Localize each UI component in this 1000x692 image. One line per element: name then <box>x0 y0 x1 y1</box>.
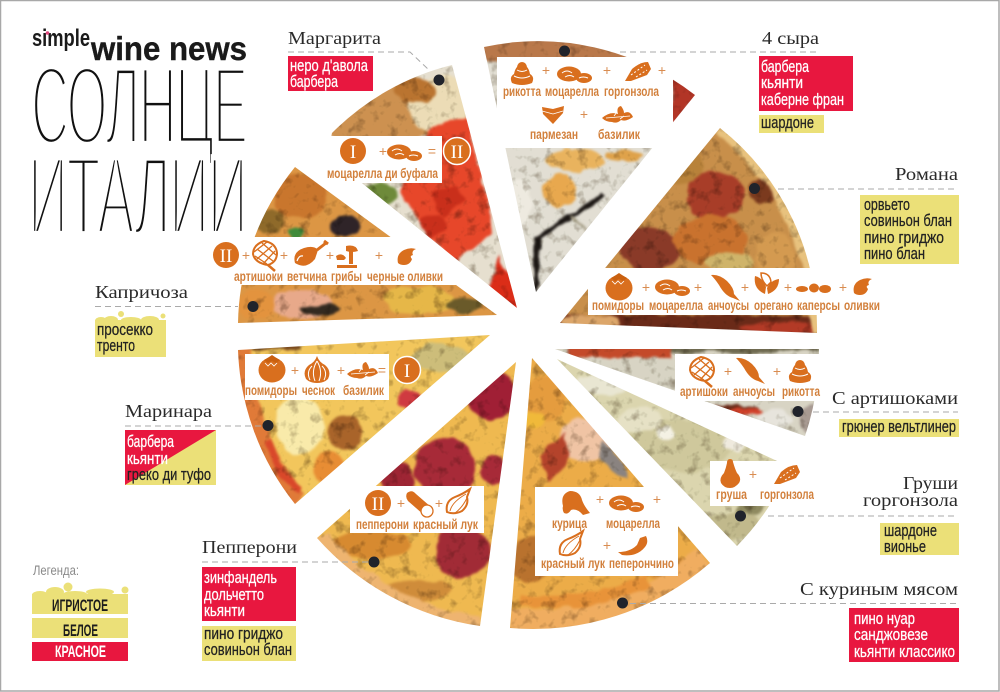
ingredient label: 4 сыра: + <box>603 62 611 78</box>
badge II: II <box>451 142 463 163</box>
badge II <box>444 138 470 164</box>
ingredient label: Маргарита: + <box>379 143 387 159</box>
ingredient label: Капричоза: ветчина <box>287 268 327 284</box>
callout: Романа: орвьето <box>864 195 910 214</box>
ingredient label: С куриным мясом: красный лук <box>541 555 606 571</box>
ingredient label: Капричоза: + <box>326 247 334 263</box>
ingredient label: Пепперони: + <box>435 495 443 511</box>
callout: Пепперони: Пепперони <box>202 537 297 557</box>
callout: Романа <box>749 164 959 264</box>
icon: basil <box>347 362 378 379</box>
callout: С куриным мясом: С куриным мясом <box>800 579 958 599</box>
ingredient label: С куриным мясом: пеперончино <box>609 555 674 571</box>
pizza slice: Пепперони <box>317 362 516 626</box>
icon: artichoke <box>690 357 714 387</box>
ingredient label: Капричоза: + <box>280 247 288 263</box>
legend: white: БЕЛОЕ <box>63 621 98 640</box>
icon: basil <box>602 106 633 123</box>
ingredient label: Пепперони <box>350 486 484 533</box>
callout: Пепперони: совиньон блан <box>204 640 292 659</box>
ingredient label: С куриным мясом <box>535 487 678 576</box>
icon: ricotta <box>511 62 533 85</box>
ingredient label: С артишоками: анчоусы <box>733 383 775 399</box>
callout: Маринара <box>125 401 274 485</box>
ingredient label: Романа: орегано <box>754 297 793 313</box>
callout: 4 сыра: 4 сыра <box>762 28 819 48</box>
ingredient label: С куриным мясом: + <box>653 491 661 507</box>
callout: С артишоками <box>792 388 959 437</box>
legend: sparkling: ИГРИСТОЕ <box>52 596 108 615</box>
callout: Маринара: барбера <box>127 432 174 451</box>
icon: pear <box>720 459 740 488</box>
icon: tomato <box>258 355 286 382</box>
ingredient label: С артишоками <box>675 354 821 401</box>
callout: Пепперони: дольчетто <box>204 585 264 604</box>
callout: Капричоза: просекко <box>97 320 153 339</box>
ingredient label: Романа: помидоры <box>592 297 644 313</box>
ingredient label: Маринара <box>245 354 420 400</box>
ingredient label: Романа: + <box>642 279 650 295</box>
ingredient label: Романа: + <box>839 279 847 295</box>
callout: Романа: пино гриджо <box>864 228 944 247</box>
ingredient label: Романа: + <box>741 279 749 295</box>
icon: gorgonzola <box>774 465 800 484</box>
badge I <box>340 138 366 164</box>
callout: Маринара: кьянти <box>127 449 168 468</box>
callout: 4 сыра <box>559 28 853 133</box>
ingredient label: Груши горгонзола: груша <box>716 486 747 502</box>
ingredient label: Капричоза: + <box>242 247 250 263</box>
icon: sausage <box>406 491 433 517</box>
ingredient label: Маринара: помидоры <box>245 382 297 398</box>
ingredient label: Романа: моцарелла <box>649 297 703 313</box>
legend <box>32 562 128 661</box>
callout: Маргарита: Маргарита <box>288 28 381 48</box>
ingredient label: Романа: + <box>694 279 702 295</box>
icon: mozzarella <box>557 66 592 83</box>
logo: simple wine news: wine news <box>90 30 247 67</box>
ingredient label: Капричоза: артишоки <box>234 268 283 284</box>
ingredient label: Романа <box>588 268 882 315</box>
ingredient label: С артишоками: рикотта <box>782 383 820 399</box>
pizza slice: Капричоза <box>238 167 497 323</box>
ingredient label: 4 сыра: пармезан <box>530 126 578 142</box>
ingredient label: Капричоза: грибы <box>331 268 362 284</box>
callout: 4 сыра: барбера <box>761 57 809 76</box>
icon: olive <box>854 278 872 295</box>
ingredient label: 4 сыра: рикотта <box>503 83 541 99</box>
ingredient label: С куриным мясом: + <box>596 491 604 507</box>
ingredient label: Романа: + <box>784 279 792 295</box>
ingredient label: Романа: оливки <box>844 297 880 313</box>
callout: Пепперони <box>202 537 380 661</box>
callout: 4 сыра: кьянти <box>761 73 803 92</box>
pizza slice: Романа <box>560 128 818 333</box>
ingredient label: Капричоза <box>213 237 457 285</box>
ingredient label: С артишоками: + <box>724 363 732 379</box>
ingredient label: Пепперони: красный лук <box>413 516 479 532</box>
callout: Маринара: Маринара <box>125 401 212 421</box>
callout: Капричоза <box>95 282 258 357</box>
ingredient label: Маргарита: моцарелла ди буфала <box>327 165 438 181</box>
icon: capers <box>796 284 831 293</box>
icon: oregano <box>755 273 779 294</box>
icon: anchovy <box>711 275 740 301</box>
ingredient label: Груши горгонзола: + <box>749 466 757 482</box>
badge I: I <box>350 142 356 163</box>
icon: ricotta <box>789 360 811 383</box>
icon: garlic <box>305 356 329 383</box>
ingredient label: С артишоками: артишоки <box>680 383 728 399</box>
icon: parmesan <box>542 106 564 124</box>
icon: mushroom <box>336 246 358 268</box>
ingredient label: Романа: анчоусы <box>708 297 749 313</box>
ingredient label: 4 сыра: горгонзола <box>604 83 659 99</box>
title: Солнце Италии: ИТАЛИИ <box>28 133 246 258</box>
title: Солнце Италии: СОЛНЦЕ <box>31 44 247 168</box>
icon: red onion <box>560 531 583 555</box>
pizza slice: Маринара <box>238 335 490 504</box>
ingredient label: С куриным мясом: моцарелла <box>606 515 660 531</box>
logo: simple wine news: simple <box>32 25 90 52</box>
ingredient label: 4 сыра: + <box>658 62 666 78</box>
legend: Легенда: <box>33 562 79 578</box>
icon: olive <box>398 248 416 265</box>
badge II: II <box>220 246 232 267</box>
ingredient label: Маринара: + <box>291 362 299 378</box>
callout: Пепперони: зинфандель <box>204 568 277 587</box>
callout: Груши горгонзола: горгонзола <box>863 490 958 510</box>
callout: С артишоками: С артишоками <box>832 388 958 408</box>
callout: 4 сыра: шардоне <box>761 113 814 132</box>
ingredient label: Пепперони: пепперони <box>356 516 409 532</box>
pizza slice: С артишоками <box>555 349 819 436</box>
badge I <box>394 356 420 384</box>
ingredient label: Груши горгонзола <box>710 459 816 506</box>
icon: mozzarella <box>609 496 644 512</box>
ingredient label: 4 сыра: + <box>580 106 588 122</box>
ingredient label: С артишоками: + <box>773 363 781 379</box>
callout: 4 сыра: каберне фран <box>761 90 844 109</box>
pizza slice: 4 сыра <box>484 41 695 292</box>
ingredient label: Капричоза: черные оливки <box>367 268 443 284</box>
icon: peperoncino <box>618 536 647 555</box>
badge II: II <box>372 494 384 515</box>
callout: Маргарита <box>288 28 444 91</box>
icon: tomato <box>606 273 632 300</box>
ingredient label: Маринара: чеснок <box>302 382 336 398</box>
callout: Капричоза: тренто <box>97 336 135 355</box>
callout: Груши горгонзола: Груши <box>903 473 958 493</box>
pizza slice: Маргарита <box>331 65 517 308</box>
callout: С куриным мясом: кьянти классико <box>854 642 955 661</box>
ingredient label: Романа: каперсы <box>797 297 840 313</box>
callout: Маринара: греко ди туфо <box>127 465 211 484</box>
ingredient label: Капричоза: + <box>375 247 383 263</box>
callout: Романа: совиньон блан <box>864 211 952 230</box>
logo: simple wine news <box>32 25 247 67</box>
ingredient label: Маргарита: = <box>428 143 436 159</box>
ingredient label: 4 сыра: моцарелла <box>545 83 599 99</box>
callout: С куриным мясом: санджовезе <box>854 625 928 644</box>
callout: Груши горгонзола: шардоне <box>884 521 937 540</box>
icon: mozzarella <box>387 144 422 161</box>
callout: Груши горгонзола <box>735 473 959 556</box>
icon: chicken <box>562 491 590 515</box>
ingredient label: Маринара: базилик <box>343 382 385 398</box>
legend: red: КРАСНОЕ <box>55 642 106 661</box>
title: Солнце Италии <box>28 44 247 258</box>
callout: С куриным мясом <box>617 579 959 662</box>
icon: artichoke <box>253 241 277 271</box>
ingredient label: Пепперони: + <box>397 495 405 511</box>
icon: red onion <box>447 489 470 513</box>
callout: Маргарита: неро д'авола <box>290 56 368 75</box>
callout: Капричоза: Капричоза <box>95 282 188 302</box>
ingredient label: С куриным мясом: курица <box>552 515 587 531</box>
ingredient label: С куриным мясом: + <box>603 537 611 553</box>
callout: С артишоками: грюнер вельтлинер <box>842 417 956 436</box>
badge I: I <box>404 361 410 382</box>
pizza slice: С куриным мясом <box>510 358 710 629</box>
ingredient label: 4 сыра <box>497 57 673 148</box>
icon: anchovy <box>736 358 765 384</box>
callout: Пепперони: пино гриджо <box>204 624 283 643</box>
ingredient label: Груши горгонзола: горгонзола <box>760 486 814 502</box>
callout: Пепперони: кьянти <box>204 601 245 620</box>
callout: Маргарита: барбера <box>290 72 338 91</box>
icon: gorgonzola <box>625 62 651 81</box>
callout: Груши горгонзола: вионье <box>884 537 926 556</box>
icon: ham <box>294 241 328 266</box>
ingredient label: 4 сыра: базилик <box>598 126 641 142</box>
ingredient label: Маринара: = <box>378 362 386 378</box>
callout: Романа: Романа <box>895 164 958 184</box>
ingredient label: 4 сыра: + <box>542 62 550 78</box>
callout: С куриным мясом: пино нуар <box>854 609 915 628</box>
icon: mozzarella <box>655 280 690 296</box>
callout: Романа: пино блан <box>864 244 925 263</box>
ingredient label: Маргарита <box>327 136 470 183</box>
ingredient label: Маринара: + <box>337 362 345 378</box>
pizza slice: Груши горгонзола <box>557 359 777 546</box>
badge II <box>213 242 239 268</box>
